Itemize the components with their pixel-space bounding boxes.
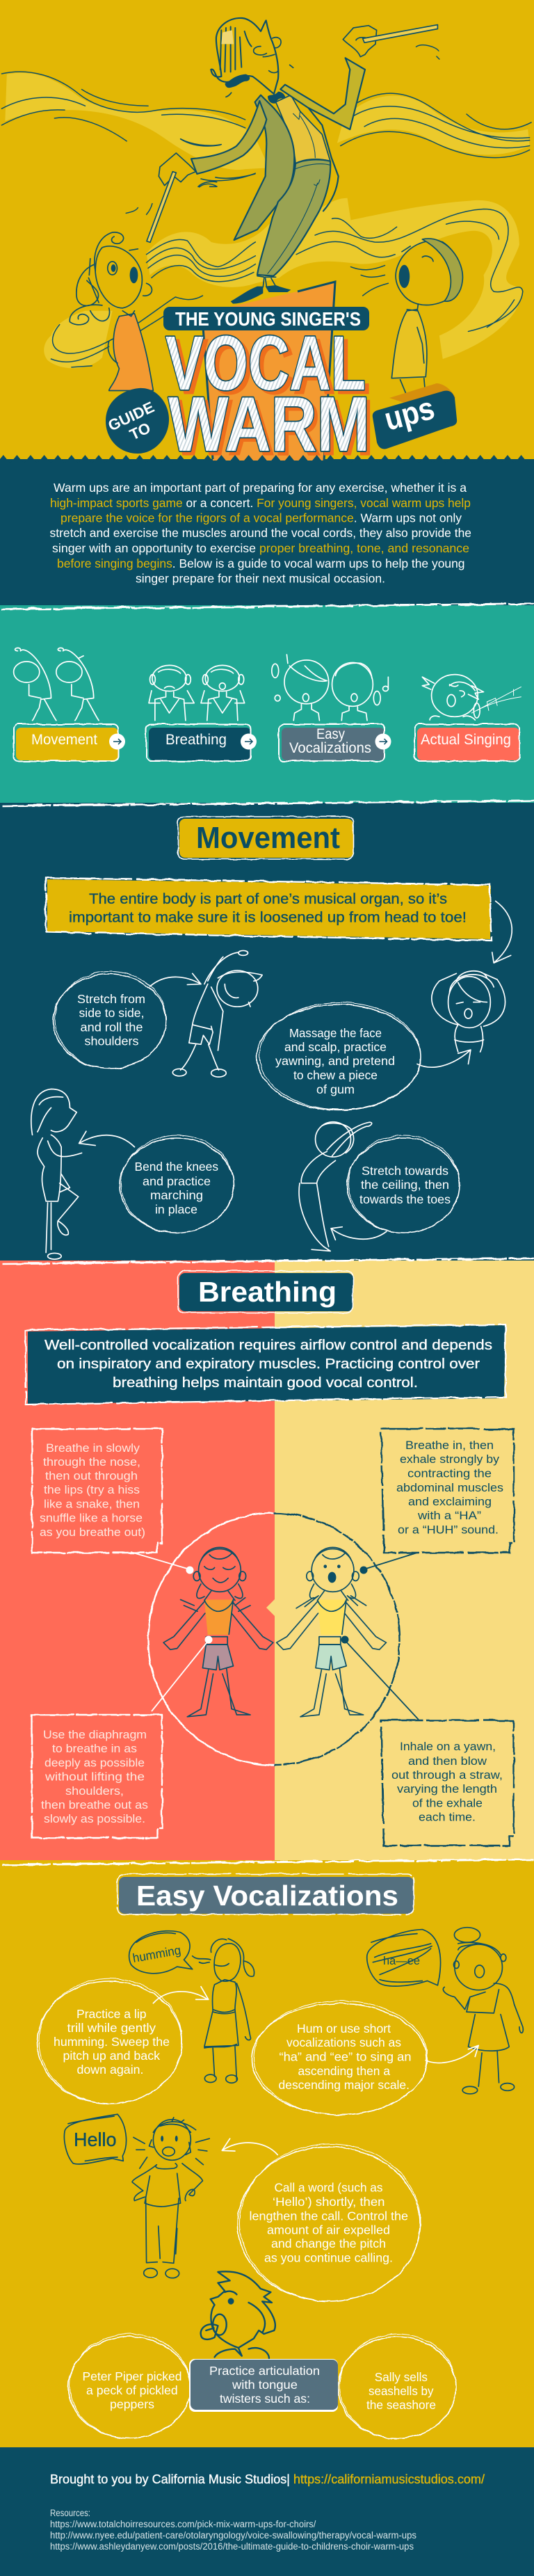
chalk circle: massage: yawning, and pretend [275,1054,395,1068]
chalk circle: Sally sells: the seashore [366,2398,436,2412]
chalk dividers [2,603,534,1865]
pointers [131,1552,419,1720]
chalk circle: short vocalizations: Hum or use short [297,2022,391,2035]
panel: footer [50,2472,485,2552]
intro text: singer prepare for their next musical occasion. [136,572,385,586]
chalk circle: lip trill: trill while gently [67,2021,156,2035]
arrow: massage circle to girl [417,1050,471,1067]
title banner: The Young Singer's: THE YOUNG SINGER'S [175,308,361,330]
title: WARM: WARM [172,385,373,471]
box: breathe in slowly: through the nose, [43,1456,140,1469]
credit line: Brought to you by California Music Studios| https://californiamusicstudios.com/ [50,2472,485,2486]
icon: conductor [147,18,377,304]
box: tongue twisters: with tongue [232,2378,298,2392]
arrow: to stretching person [331,1227,387,1240]
icon: calling boy [64,2114,209,2278]
chalk circle: short vocalizations: ascending then a [298,2064,390,2078]
box: inhale on a yawn: each time. [419,1811,476,1824]
badge: ups [373,383,457,449]
chalk circle: stretch side to side [53,971,166,1069]
box: exhale strongly: or a “HUH” sound. [398,1523,499,1536]
intro text: singer with an opportunity to exercise proper breathing, tone, and resonance [52,541,469,555]
arrow: to side-bending child [150,973,201,986]
panel: easy vocalizations [38,1874,523,2438]
box: exhale strongly: contracting the [407,1468,492,1480]
chalk circle: marching: in place [155,1202,197,1216]
text: humming: humming [131,1943,182,1965]
box: exhale strongly: and exclaiming [408,1496,492,1508]
chalk circle: stretch to ceiling: towards the toes [359,1192,451,1206]
icon: humming girl [129,1931,254,2083]
icon: inhaling child [163,1547,273,1717]
arrow: to humming girl [153,1987,209,2003]
icon: side-bending child [172,950,262,1077]
resources: http://www.nyee.edu/patient-care/otolaryngology/voice-swallowing/therapy/vocal-warm-ups [50,2530,416,2541]
intro text: Warm ups are an important part of preparing for any exercise, whether it is a [54,481,467,495]
chalk circle: lip trill: pitch up and back [63,2049,160,2063]
chalk circle: call a word: and change the pitch [271,2237,386,2250]
chalk circle: lip trill: humming. Sweep the [54,2035,170,2049]
arrow: to calling boy [222,2138,277,2154]
resources: https://www.ashleydanyew.com/posts/2016/the-ultimate-guide-to-childrens-choir-warm-ups [50,2541,414,2552]
badge: Guide to: TO [127,419,153,444]
orange flag behind title [202,282,335,461]
heading: Breathing [178,1271,353,1313]
wave lines [1,45,531,367]
notch [266,1599,275,1616]
text: Hello: Hello [74,2129,117,2150]
icon: vocalising children [272,655,388,721]
panel: movement [31,817,512,1259]
arrow: callout to massaging girl [492,901,512,963]
box: exhale strongly [381,1429,514,1553]
heading: Breathing: Breathing [198,1276,337,1308]
box: tongue twisters [189,2359,338,2412]
button: Breathing [146,724,257,761]
button: Movement: Movement [31,732,97,748]
chalk circle: call a word: Call a word (such as [274,2180,383,2194]
chalk circle: Peter Piper [68,2334,191,2438]
box: diaphragm: then breathe out as [41,1799,148,1811]
button: Movement [14,724,125,761]
icon: singing woman [367,1928,523,2094]
box: exhale strongly: Breathe in, then [405,1439,494,1452]
button: Actual Singing [414,724,519,761]
icon: singing child [422,675,521,720]
chalk circle: stretch side to side: and roll the [81,1020,143,1034]
text: ha ee: ha—ee [383,1954,420,1967]
ribbons: musical waves [5,73,530,368]
badge: Guide to: GUIDE [106,398,157,435]
icon: marching girl [31,1089,82,1259]
badge: ups: ups [380,390,438,438]
chalk circle: short vocalizations: “ha” and “ee” to sing an [280,2049,412,2063]
intro text: before singing begins. Below is a guide to vocal warm ups to help the young [57,557,464,570]
icon: stretching children [14,648,99,721]
title: VOCAL: VOCAL [170,324,370,410]
button: Easy Vocalizations [279,724,391,761]
box: diaphragm: deeply as possible [44,1757,145,1770]
intro text: stretch and exercise the muscles around the vocal cords, they also provide the [50,526,471,540]
chalk circle: Sally sells [338,2334,456,2438]
badge: Guide to [106,388,169,454]
chalk circle: call a word [238,2144,421,2301]
chalk circle: marching [120,1135,234,1233]
chalk circle: stretch side to side: side to side, [79,1006,145,1020]
chalk circle: lip trill: down again. [76,2063,143,2077]
box: inhale on a yawn: varying the length [397,1783,497,1795]
box: inhale on a yawn: and then blow [408,1755,487,1768]
box: inhale on a yawn: Inhale on a yawn, [400,1741,496,1753]
box: diaphragm: Use the diaphragm [43,1729,147,1741]
box: diaphragm: shoulders, [65,1785,124,1798]
icon: exhaling child [277,1547,386,1717]
icon: baton [363,25,437,42]
chalk circle: massage: to chew a piece [293,1069,378,1082]
box: exhale strongly: abdominal muscles [396,1482,503,1494]
chalk circle: call a word: lengthen the call. Control the [249,2209,408,2223]
box: breathe in slowly: snuffle like a horse [40,1512,143,1525]
zigzag edge [0,455,528,467]
callout: airflow control [26,1325,505,1405]
arrow: to marching girl [79,1131,134,1147]
intro text: high-impact sports game or a concert. For young singers, vocal warm ups help [50,496,471,510]
chalk circle: stretch to ceiling: the ceiling, then [361,1178,449,1192]
box: breathe in slowly: Breathe in slowly [46,1442,140,1455]
callout: whole body: The entire body is part of one’s musical organ, so it’s [89,891,447,907]
chalk circle: marching: marching [150,1188,203,1202]
icon: girl singer [70,232,153,390]
box: inhale on a yawn: out through a straw, [391,1769,503,1782]
title: VOCAL: VOCAL [165,321,366,406]
box: breathe in slowly: then out through [45,1470,138,1482]
panel: breathing [26,1271,514,1846]
chalk circle: massage: of gum [316,1082,355,1096]
heading: Easy Vocalizations [118,1874,414,1914]
box: breathe in slowly: like a snake, then [44,1498,140,1511]
intro text [50,481,471,586]
chalk circle: call a word: ‘Hello’) shortly, then [273,2195,385,2209]
box: diaphragm: to breathe in as [52,1743,137,1755]
icon: stretching person [299,1122,372,1251]
box: tongue twisters: twisters such as: [220,2392,310,2406]
chalk circle: stretch to ceiling: Stretch towards [362,1164,448,1178]
box: tongue twisters: Practice articulation [209,2364,320,2378]
chalk circle: call a word: amount of air expelled [267,2223,390,2237]
icon: boy with tongue out [201,2271,275,2358]
box: exhale strongly: exhale strongly by [400,1453,500,1466]
chalk circle: call a word: as you continue calling. [264,2251,393,2265]
button: Actual Singing: Actual Singing [421,732,511,748]
chalk circle: Sally sells: seashells by [369,2384,434,2398]
callout: whole body: important to make sure it is loosened up from head to toe! [69,910,467,925]
button: Easy Vocalizations: Easy [316,726,345,742]
heading: Easy Vocalizations: Easy Vocalizations [136,1880,398,1912]
chalk circle: massage: Massage the face [289,1026,382,1040]
big chalk circle [148,1513,400,1765]
box: diaphragm: slowly as possible. [44,1813,145,1825]
chalk circle: Peter Piper: peppers [110,2397,154,2411]
chalk circle: stretch side to side: shoulders [85,1034,139,1048]
panel: hero header illustration [0,18,531,471]
chalk circle: marching: and practice [143,1174,211,1188]
box: exhale strongly: with a “HA” [417,1510,481,1522]
title: WARM: WARM [168,381,370,467]
box: breathe in slowly [32,1429,162,1553]
button: Easy Vocalizations: Vocalizations [289,740,371,756]
chalk circle: stretch to ceiling [347,1135,460,1233]
heading: Movement: Movement [196,821,340,855]
callout: airflow control: on inspiratory and expiratory muscles. Practicing control over [57,1357,480,1372]
chalk circle: short vocalizations: descending major scale. [278,2078,410,2092]
heading: Movement [178,817,353,859]
box: diaphragm: without lifting the [44,1771,145,1784]
box: inhale on a yawn: of the exhale [412,1798,483,1810]
chalk circle: lip trill [38,1978,182,2104]
resources: Resources: [50,2508,90,2518]
box: breathe in slowly: the lips (try a hiss [44,1484,140,1496]
resources [50,2508,416,2552]
resources: https://www.totalchoirresources.com/pick-mix-warm-ups-for-choirs/ [50,2519,316,2529]
panel: contents navigation [14,648,521,761]
arrow: to singing woman [426,2045,478,2063]
chalk circle: marching: Bend the knees [135,1160,218,1174]
box: inhale on a yawn [381,1720,514,1846]
icon: breathing children [149,665,245,721]
box: diaphragm [32,1715,162,1838]
icon: massaging girl [432,971,505,1052]
box: breathe in slowly: as you breathe out) [40,1526,145,1539]
callout: airflow control: breathing helps maintain good vocal control. [113,1375,418,1391]
chalk circle: lip trill: Practice a lip [76,2007,146,2021]
chalk circle: stretch side to side: Stretch from [77,992,145,1006]
callout: airflow control: Well-controlled vocalization requires airflow control and depends [44,1338,492,1353]
callout: whole body [46,878,492,941]
chalk circle: short vocalizations: vocalizations such as [286,2035,401,2049]
chalk circle: short vocalizations [252,2001,428,2115]
chalk circle: Sally sells: Sally sells [375,2370,428,2384]
icon: boy singer [391,239,462,396]
chalk circle: Peter Piper: Peter Piper picked [82,2369,182,2383]
intro text: prepare the voice for the rigors of a vocal performance. Warm ups not only [60,511,462,525]
chalk circle: massage [257,1002,421,1110]
button: Breathing: Breathing [165,732,227,748]
chalk circle: Peter Piper: a peck of pickled [86,2383,178,2397]
chalk circle: massage: and scalp, practice [284,1040,387,1054]
